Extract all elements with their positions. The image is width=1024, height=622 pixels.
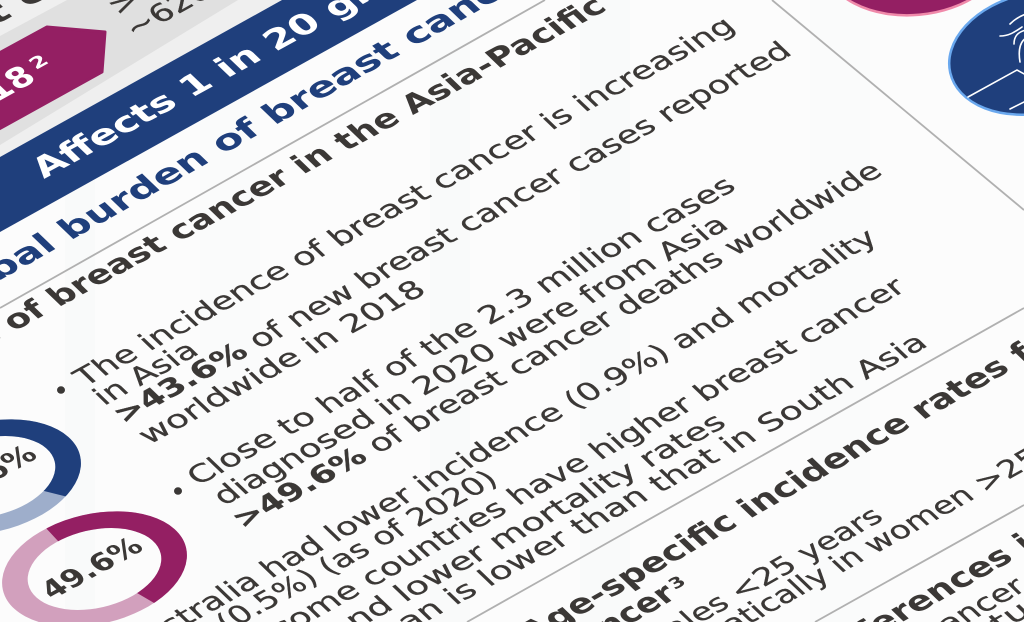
- donut chart: 49.6%: 49.6%: [33, 531, 150, 605]
- text block: Asia incidence bullet: worldwide in 2018: [130, 274, 433, 450]
- text block: Asia incidence bullet: [57, 11, 798, 450]
- text block: age-specific details: [494, 394, 1024, 622]
- banner: Affects 1 in 20 girls: [0, 0, 427, 232]
- donut chart: 49.6%: [2, 511, 187, 622]
- text block: close to half bullet: Close to half of the 2.3 million cases: [179, 171, 743, 491]
- heading: age-specific incidence rates: 3: [664, 573, 691, 593]
- icon: blue circle with figure: [937, 0, 1024, 131]
- tag: magenta year badge: 2: [24, 51, 54, 73]
- text block: regional differences: [113, 223, 934, 622]
- text block: Asia incidence bullet: in Asia: [85, 335, 206, 411]
- text block: Asia incidence bullet: The incidence of breast cancer is increasing: [65, 11, 742, 392]
- icon: magenta circle: [819, 0, 1009, 23]
- text block: close to half bullet: >49.6% of breast cancer deaths worldwide: [224, 156, 889, 534]
- tag: magenta year badge: [0, 27, 105, 134]
- text block: Asia incidence bullet: >43.6% of new breast cancer cases reported: [105, 36, 798, 429]
- text block: differences details: [815, 571, 1024, 622]
- text block: close to half bullet: diagnosed in 2020 were from Asia: [205, 209, 735, 511]
- donut chart: 43.6%: [0, 419, 81, 531]
